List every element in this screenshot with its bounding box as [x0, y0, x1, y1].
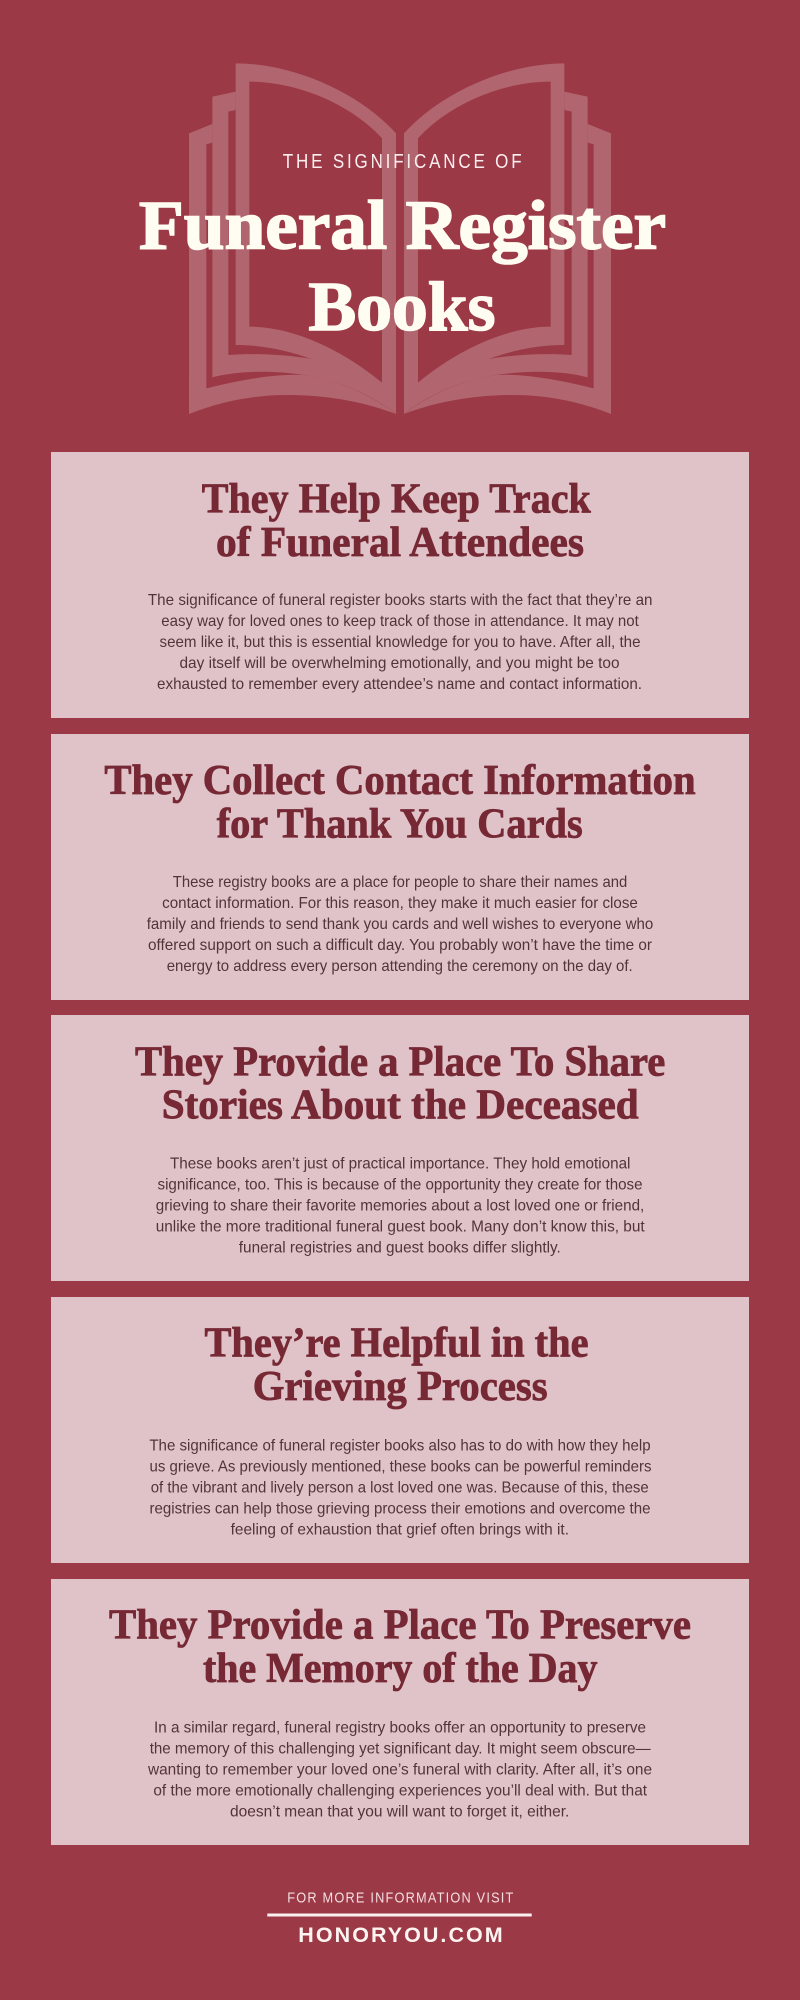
body text: registries can help those grieving process their emotions and overcome the: [150, 1501, 651, 1518]
body text: grieving to share their favorite memories about a lost loved one or friend,: [156, 1198, 644, 1215]
subtitle: THE SIGNIFICANCE OF: [283, 150, 522, 172]
heading: of Funeral Attendees: [216, 520, 584, 566]
heading: [204, 1321, 588, 1410]
body text: In a similar regard, funeral registry books offer an opportunity to preserve: [154, 1720, 646, 1737]
heading: They Help Keep Track: [202, 477, 591, 523]
body text: The significance of funeral register books starts with the fact that they’re an: [148, 592, 652, 609]
panel: grieving process: [51, 1297, 749, 1563]
body text: energy to address every person attending the ceremony on the day of.: [167, 958, 633, 975]
footer label: FOR MORE INFORMATION VISIT: [287, 1888, 514, 1906]
body text: [147, 874, 653, 975]
heading: They’re Helpful in the: [204, 1321, 588, 1367]
website: HONORYOU.COM: [298, 1923, 503, 1947]
body text: of the more emotionally challenging experiences you’ll deal with. But that: [153, 1783, 648, 1800]
heading: Stories About the Deceased: [162, 1083, 639, 1129]
body text: [148, 592, 652, 693]
body text: feeling of exhaustion that grief often brings with it.: [231, 1522, 569, 1539]
heading: They Collect Contact Information: [104, 758, 696, 804]
heading: [135, 1039, 665, 1129]
heading: [109, 1603, 691, 1692]
body text: [149, 1438, 652, 1539]
body text: doesn’t mean that you will want to forget it, either.: [230, 1804, 569, 1821]
heading: They Provide a Place To Preserve: [109, 1603, 691, 1649]
body text: day itself will be overwhelming emotionally, and you might be too: [180, 655, 620, 672]
body text: The significance of funeral register books also has to do with how they help: [149, 1438, 651, 1455]
heading: for Thank You Cards: [217, 802, 583, 848]
body text: These registry books are a place for people to share their names and: [173, 874, 627, 891]
body text: [156, 1156, 645, 1257]
body text: wanting to remember your loved one’s funeral with clarity. After all, it’s one: [147, 1762, 652, 1779]
body text: contact information. For this reason, they make it much easier for close: [162, 895, 638, 912]
panel: preserve the memory: [51, 1579, 749, 1845]
heading: [202, 477, 591, 566]
heading: [104, 758, 696, 848]
heading: the Memory of the Day: [203, 1646, 597, 1692]
body text: family and friends to send thank you cards and well wishes to everyone who: [147, 916, 653, 933]
footer: [267, 1888, 532, 1947]
heading: Grieving Process: [253, 1364, 548, 1410]
body text: offered support on such a difficult day. You probably won’t have the time or: [148, 937, 653, 954]
body text: seem like it, but this is essential knowledge for you to have. After all, the: [160, 634, 641, 651]
heading: They Provide a Place To Share: [135, 1039, 665, 1085]
body text: significance, too. This is because of the opportunity they create for those: [158, 1177, 643, 1194]
main title: Books: [308, 269, 496, 346]
main title: Funeral Register: [139, 187, 666, 264]
body text: exhausted to remember every attendee’s name and contact information.: [157, 676, 642, 693]
panel: share stories: [51, 1015, 749, 1281]
body text: unlike the more traditional funeral guest book. Many don’t know this, but: [156, 1219, 645, 1236]
body text: easy way for loved ones to keep track of those in attendance. It may not: [161, 613, 639, 630]
body text: us grieve. As previously mentioned, these books can be powerful reminders: [150, 1459, 652, 1476]
body text: funeral registries and guest books differ slightly.: [239, 1240, 561, 1257]
body text: These books aren’t just of practical importance. They hold emotional: [170, 1156, 630, 1173]
body text: of the vibrant and lively person a lost loved one was. Because of this, these: [151, 1480, 649, 1497]
icon: open book: [189, 63, 611, 414]
panel: collect contact information: [51, 734, 749, 1000]
panel: keep track of attendees: [51, 452, 749, 718]
body text: [147, 1720, 652, 1821]
body text: the memory of this challenging yet significant day. It might seem obscure—: [150, 1741, 651, 1758]
main title: [139, 187, 666, 346]
title block: [139, 150, 666, 346]
